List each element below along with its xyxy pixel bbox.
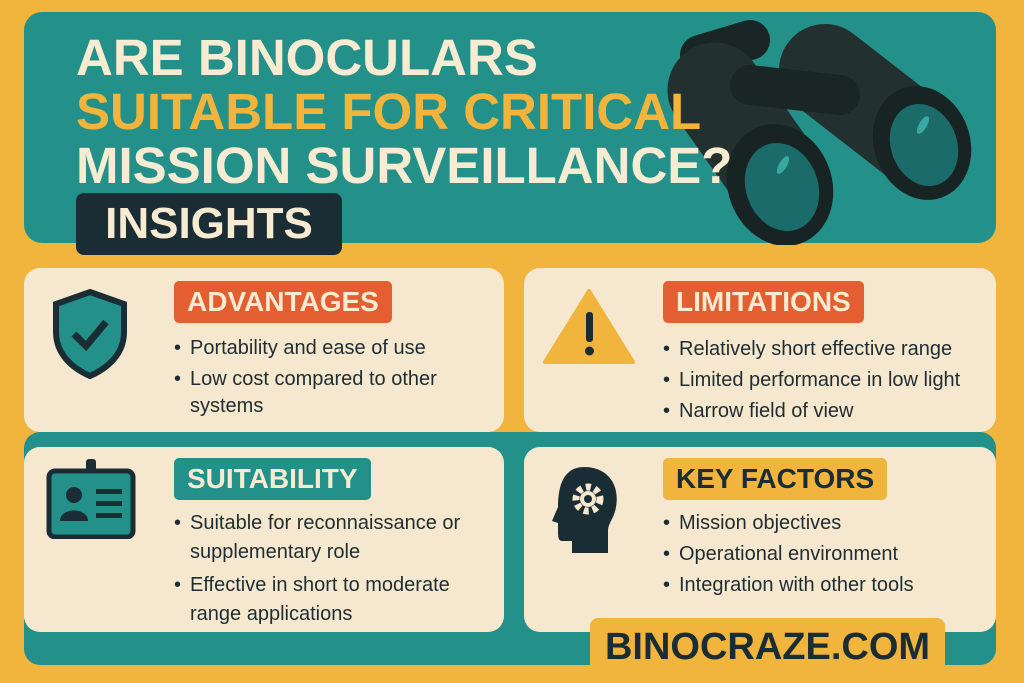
bullets: Portability and ease of use	[190, 337, 426, 359]
bullets	[664, 512, 914, 596]
heading: LIMITATIONS	[676, 286, 851, 317]
bullets: Operational environment	[679, 543, 898, 565]
heading: KEY FACTORS	[676, 463, 874, 494]
footer: website: BINOCRAZE.COM	[605, 626, 930, 668]
heading: SUITABILITY	[187, 463, 358, 494]
insights badge	[76, 193, 342, 255]
bullets: Effective in short to moderate range applications	[190, 574, 450, 625]
bullets: Mission objectives	[679, 512, 841, 534]
icon: shield	[53, 288, 127, 380]
title	[76, 29, 732, 194]
bullets: Narrow field of view	[679, 400, 854, 422]
heading	[663, 281, 864, 323]
icon: binoculars	[668, 20, 972, 245]
bullets: Low cost compared to other systems	[190, 368, 437, 417]
bullets	[174, 337, 437, 417]
header panel	[24, 12, 996, 243]
title: MISSION SURVEILLANCE?	[76, 137, 732, 194]
heading	[174, 458, 371, 500]
bullets: Limited performance in low light	[679, 369, 960, 391]
heading: ADVANTAGES	[187, 286, 379, 317]
bullets	[174, 512, 460, 625]
panel: suitability	[24, 447, 504, 632]
bottom teal panel	[24, 432, 996, 665]
insights badge: INSIGHTS	[105, 199, 313, 248]
icon: head with gear	[552, 467, 617, 553]
heading	[174, 281, 392, 323]
panel: limitations	[524, 268, 996, 432]
icon: id card	[46, 459, 136, 539]
panel: advantages	[24, 268, 504, 432]
title: SUITABLE FOR CRITICAL	[76, 83, 701, 140]
bullets: Suitable for reconnaissance or supplementary role	[190, 512, 460, 563]
icon: warning	[543, 288, 636, 364]
heading	[663, 458, 887, 500]
title: ARE BINOCULARS	[76, 29, 538, 86]
bullets: Integration with other tools	[679, 574, 914, 596]
panel: key factors	[524, 447, 996, 632]
bullets	[664, 338, 960, 422]
bullets: Relatively short effective range	[679, 338, 952, 360]
